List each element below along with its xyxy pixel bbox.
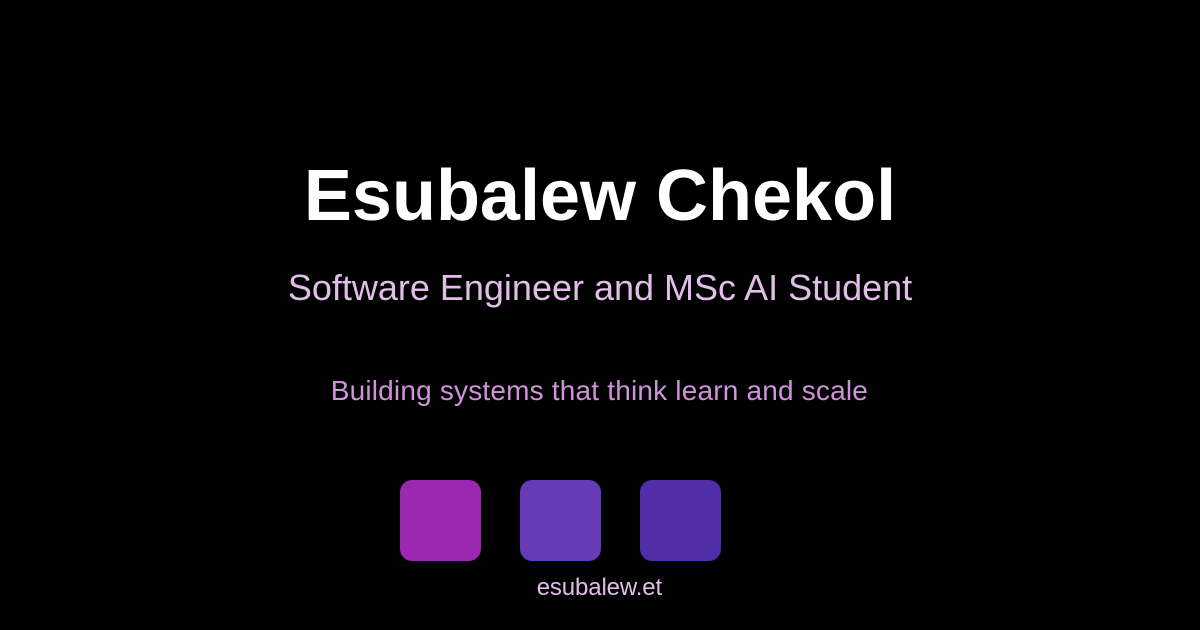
- icon: magenta square: [400, 480, 481, 561]
- subtitle: Software Engineer and MSc AI Student: [288, 267, 912, 308]
- title: Esubalew Chekol: [304, 156, 896, 236]
- tagline: Building systems that think learn and scale: [331, 375, 868, 406]
- icon: violet square: [520, 480, 601, 561]
- website url: esubalew.et: [537, 574, 662, 601]
- icon: deep purple square: [640, 480, 721, 561]
